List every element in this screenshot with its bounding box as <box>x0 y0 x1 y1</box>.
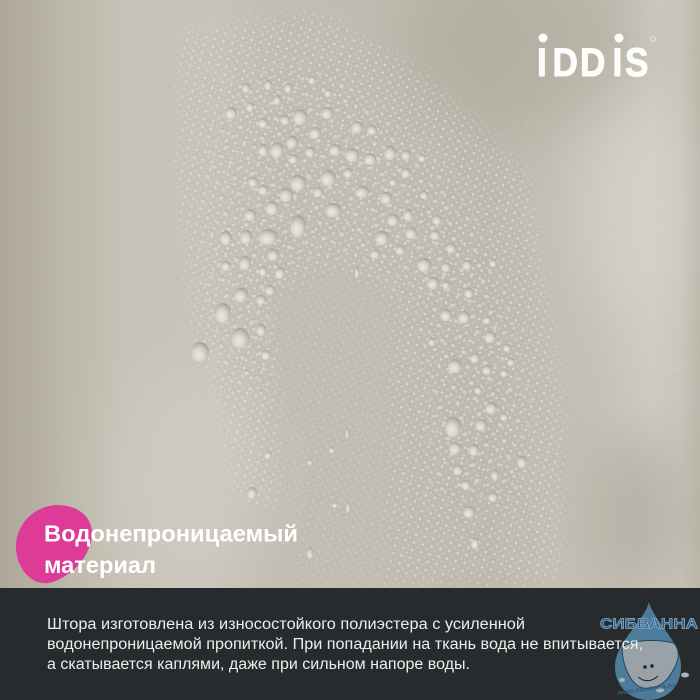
watermark: Sibvanna logo: www.sibvanna.ru <box>616 682 675 697</box>
heading: материал <box>44 552 156 578</box>
heading: Водонепроницаемый <box>44 520 298 546</box>
watermark: Sibvanna logo <box>600 602 698 700</box>
heading <box>44 520 298 578</box>
panel: dark footer <box>0 588 700 700</box>
pink blob behind heading <box>16 505 92 583</box>
body text: водонепроницаемой пропиткой. При попадании на ткань вода не впитывается, <box>47 636 643 653</box>
body text: Штора изготовлена из износостойкого полиэстера с усиленной <box>47 616 525 633</box>
water droplets on fabric <box>170 6 571 588</box>
body text: а скатывается каплями, даже при сильном напоре воды. <box>47 656 470 673</box>
logo: IDDIS: IDDIS <box>537 40 648 84</box>
body text <box>47 616 643 673</box>
watermark: Sibvanna logo: СИБВАННА <box>600 616 698 632</box>
